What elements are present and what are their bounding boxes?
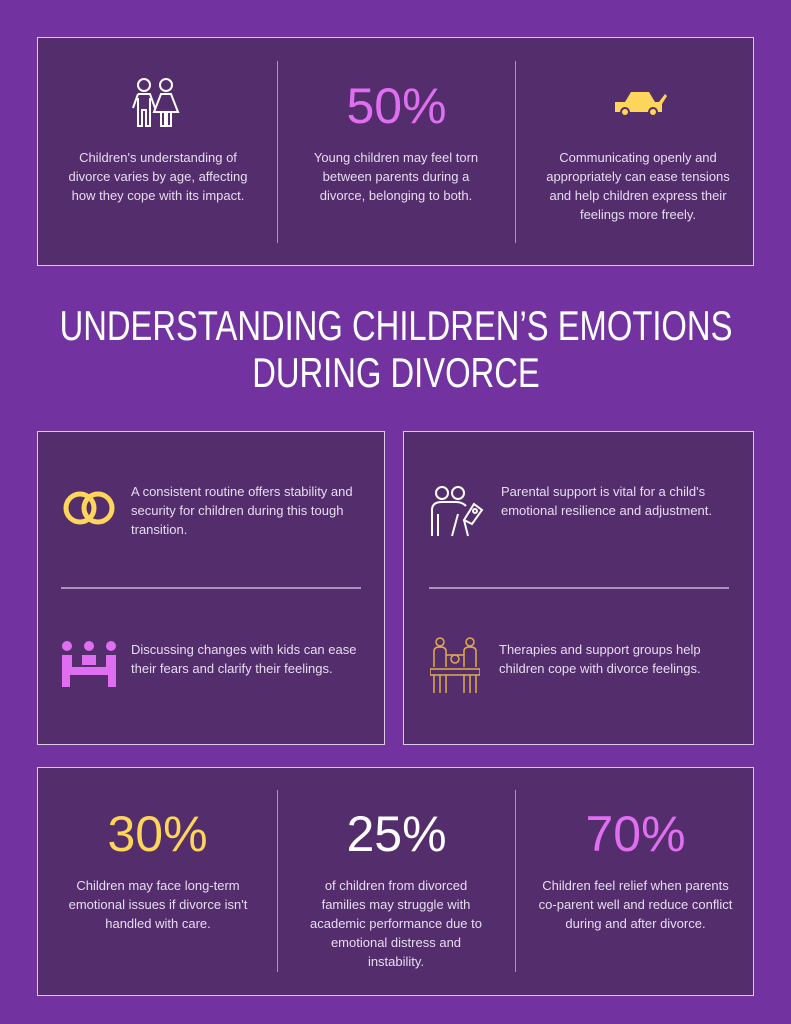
text: therapies: Therapies and support groups help children cope with divorce feelings. [499,642,701,676]
text: torn: Young children may feel torn between parents during a divorce, belonging to both. [314,150,478,203]
icon: meeting [62,641,116,687]
text: academic: of children from divorced families may struggle with academic performance due to emotional distress and instability. [310,878,482,969]
icon: therapy [430,637,480,693]
stat: 30%: 30% [107,806,208,862]
text: routine: A consistent routine offers stability and security for children during this tough transition. [131,484,353,537]
icon: parent support [431,486,484,536]
panel: left middle [37,431,385,745]
panel: bottom stats [37,767,754,996]
icon: rings [64,492,114,524]
text: long-term: Children may face long-term emotional issues if divorce isn't handled with care. [69,878,247,931]
stat: 25%: 25% [346,806,447,862]
title [59,302,732,396]
panel: right middle [403,431,754,745]
text: communicating: Communicating openly and appropriately can ease tensions and help children express their feelings more freely. [546,150,730,222]
text: relief: Children feel relief when parents co-parent well and reduce conflict during and after divorce. [539,878,732,931]
text: understanding: Children's understanding of divorce varies by age, affecting how they cope with its impact. [68,150,247,203]
panel: top stats [37,37,754,266]
icon: car [615,92,667,115]
text: discussing: Discussing changes with kids can ease their fears and clarify their feelings. [131,642,356,676]
stat: 70%: 70% [585,806,686,862]
stat: 50%: 50% [346,78,447,134]
icon: children [132,78,180,127]
title: UNDERSTANDING CHILDREN’S EMOTIONS [59,302,732,349]
title: DURING DIVORCE [252,349,539,396]
text: parental: Parental support is vital for a child's emotional resilience and adjustment. [501,484,712,518]
